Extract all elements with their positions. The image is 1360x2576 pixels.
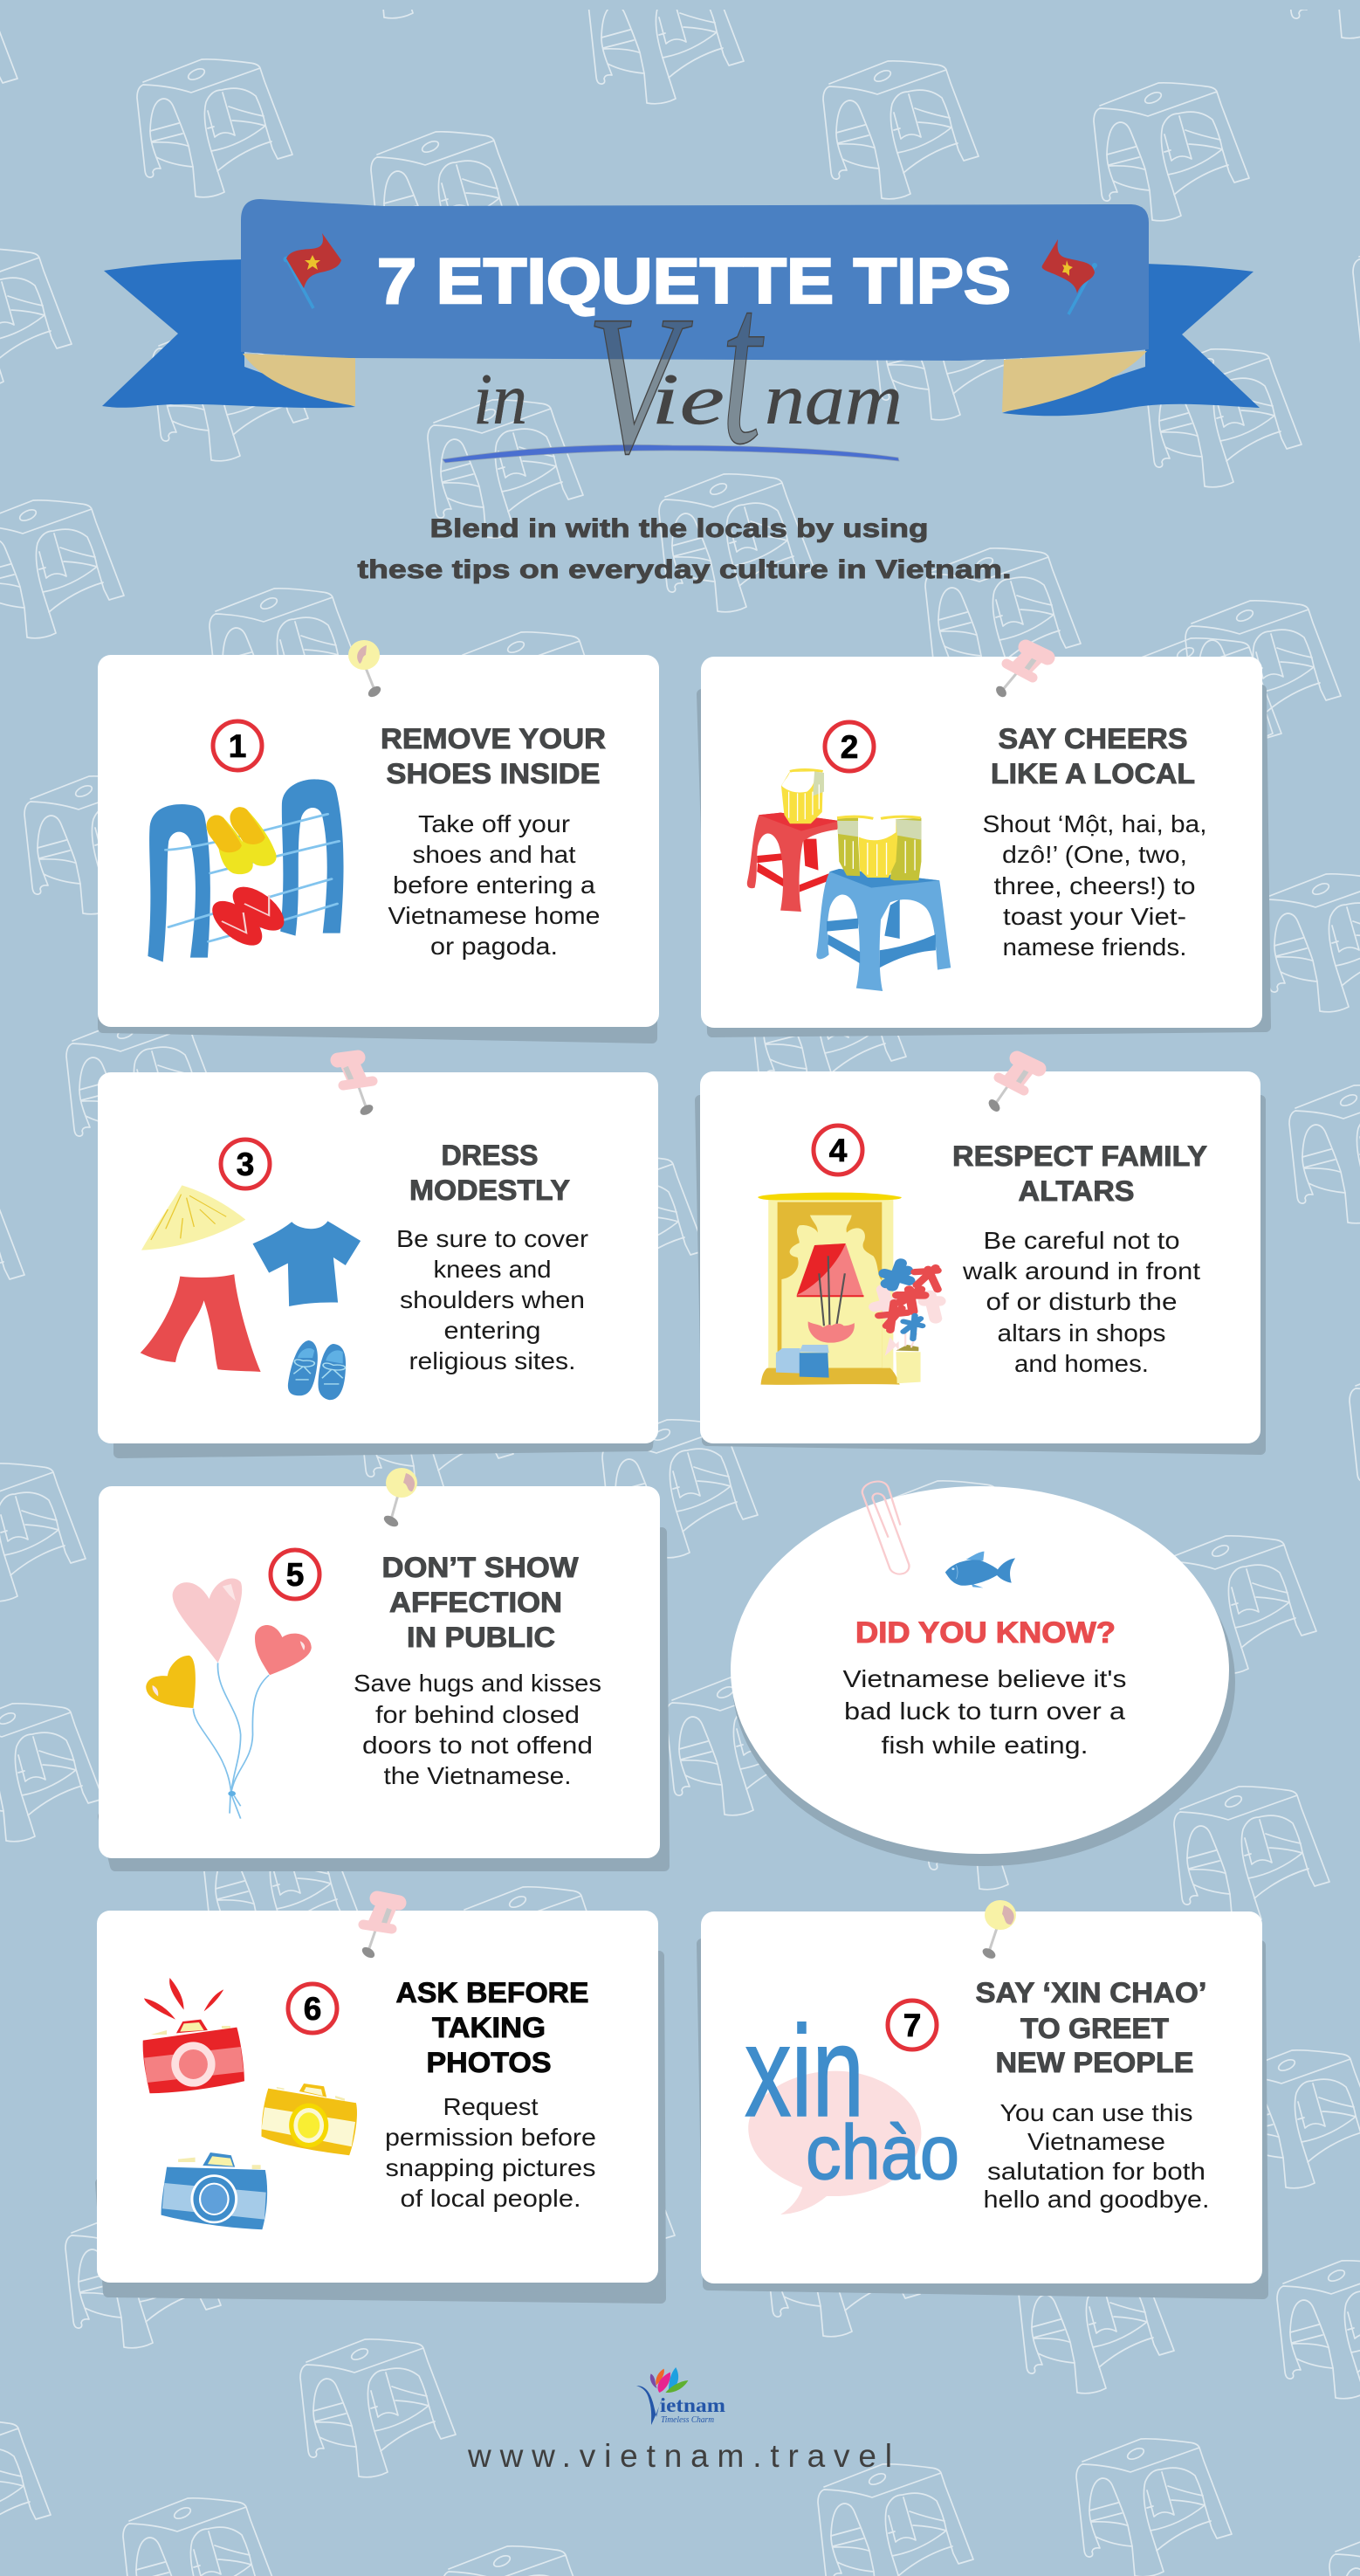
number badge 7	[888, 2001, 937, 2049]
heading	[396, 1977, 588, 2078]
title banner	[102, 199, 1260, 416]
script subtitle: in Vietnam: t	[721, 238, 766, 492]
body text: Take off your	[418, 810, 570, 837]
panel: tip 6 ask before taking photos	[97, 1898, 661, 2298]
body text: bad luck to turn over a	[844, 1698, 1125, 1725]
body text: snapping pictures	[386, 2154, 595, 2181]
body text: shoes and hat	[412, 841, 576, 868]
ellipse shadow	[732, 1498, 1235, 1866]
heading: AFFECTION	[389, 1587, 562, 1618]
number badge 1: 1	[229, 728, 246, 764]
heading	[381, 723, 606, 789]
number badge 5: 5	[286, 1557, 304, 1593]
heading: DRESS	[442, 1140, 538, 1171]
speech bubble	[748, 2071, 921, 2214]
number badge 1	[213, 721, 262, 770]
body text: Request	[443, 2093, 539, 2120]
body text	[983, 810, 1206, 961]
card shadow	[100, 1956, 661, 2298]
number badge 7: 7	[903, 2008, 921, 2043]
number badge 6: 6	[304, 1991, 321, 2027]
body text: religious sites.	[409, 1347, 576, 1374]
body text	[962, 1227, 1200, 1377]
push pin	[994, 647, 1047, 699]
logo tagline: Timeless Charm	[661, 2415, 714, 2425]
body text: before entering a	[393, 871, 595, 899]
heading: TO GREET	[1020, 2013, 1169, 2044]
number badge 3	[221, 1140, 270, 1188]
panel: tip 7 say xin chao	[701, 1900, 1263, 2294]
left flag	[283, 233, 341, 308]
number badge 5	[271, 1550, 319, 1599]
body text	[354, 1670, 601, 1789]
script subtitle: in Vietnam: ie	[651, 359, 725, 440]
heading: ASK BEFORE	[396, 1977, 588, 2008]
body text: the Vietnamese.	[384, 1762, 571, 1789]
yellow camera	[262, 2084, 357, 2155]
panel: tip 5 no affection in public	[99, 1468, 664, 1866]
heading: REMOVE YOUR	[381, 723, 606, 754]
script subtitle: in Vietnam: in	[473, 359, 545, 440]
icon: shoe rack	[148, 779, 344, 962]
icon: fish	[945, 1552, 1015, 1588]
body text: fish while eating.	[882, 1732, 1088, 1759]
body text: three, cheers!) to	[993, 872, 1196, 899]
card surface	[98, 1072, 658, 1443]
logo: Vietnam Timeless Charm	[636, 2367, 725, 2425]
panel: tip 2 say cheers	[701, 647, 1266, 1032]
body text: of or disturb the	[986, 1288, 1177, 1315]
heading: ALTARS	[1018, 1175, 1135, 1207]
heading: SHOES INSIDE	[386, 758, 601, 789]
body text: shoulders when	[400, 1286, 585, 1313]
icon: three cameras	[143, 1978, 357, 2229]
push pin	[338, 1057, 374, 1117]
heading	[991, 723, 1195, 789]
body text: Shout ‘Một, hai, ba,	[983, 810, 1206, 837]
heading: RESPECT FAMILY	[952, 1140, 1207, 1172]
script subtitle: in Vietnam: nam	[765, 359, 903, 440]
V swoosh	[636, 2386, 663, 2425]
body text: toast your Viet-	[1003, 903, 1186, 930]
body text: Vietnamese	[1027, 2128, 1165, 2155]
push pin	[382, 1468, 417, 1529]
heading: IN PUBLIC	[407, 1622, 555, 1653]
card shadow	[700, 1100, 1260, 1450]
ellipse surface	[731, 1486, 1229, 1854]
heading: DID YOU KNOW?	[855, 1616, 1116, 1650]
heading: LIKE A LOCAL	[991, 758, 1195, 789]
heading	[409, 1140, 570, 1206]
logo wordmark: ietnam	[660, 2394, 725, 2416]
body text	[396, 1225, 588, 1374]
body text: hello and goodbye.	[983, 2186, 1210, 2213]
banner body	[241, 199, 1149, 361]
body text: of local people.	[400, 2185, 581, 2212]
number badge 3: 3	[237, 1147, 254, 1182]
xin chao lettering: chào	[806, 2109, 959, 2195]
body text: Be careful not to	[983, 1227, 1180, 1254]
body text: doors to not offend	[362, 1732, 593, 1759]
panel: tip 3 dress modestly	[98, 1057, 658, 1453]
heading: MODESTLY	[409, 1174, 570, 1206]
intro text: Blend in with the locals by using	[429, 514, 929, 543]
panel: tip 1 remove your shoes	[98, 640, 659, 1038]
card surface	[701, 1911, 1262, 2283]
icon: family altar	[758, 1193, 939, 1385]
body text: knees and	[433, 1256, 552, 1283]
panel: tip 4 respect family altars	[700, 1058, 1260, 1450]
red camera with flash	[143, 1978, 244, 2093]
script subtitle: in Vietnam: V	[587, 275, 693, 495]
heading	[952, 1140, 1207, 1207]
body text: or pagoda.	[430, 933, 558, 960]
card surface	[700, 1071, 1260, 1443]
heading: TAKING	[432, 2012, 546, 2043]
card shadow	[103, 1533, 664, 1866]
body text: Vietnamese home	[388, 902, 601, 929]
icon: heart balloons	[146, 1578, 312, 1819]
heading: SAY ‘XIN CHAO’	[976, 1977, 1206, 2008]
body text: You can use this	[1000, 2099, 1192, 2126]
card shadow	[119, 1397, 653, 1453]
paper clip	[862, 1481, 909, 1574]
heading	[382, 1552, 579, 1653]
blue camera	[161, 2152, 267, 2229]
card shadow	[702, 690, 1266, 1032]
xin chao lettering: xin	[745, 2000, 864, 2144]
body text	[983, 2099, 1210, 2213]
body text	[388, 810, 601, 960]
card surface	[99, 1486, 660, 1858]
heading: DON’T SHOW	[382, 1552, 579, 1583]
heading: SAY CHEERS	[999, 723, 1187, 754]
push pin	[361, 1898, 399, 1960]
card surface	[97, 1911, 658, 2283]
left ribbon tail	[102, 259, 355, 408]
number badge 6	[288, 1984, 337, 2033]
heading	[976, 1977, 1206, 2078]
left ribbon fold	[243, 354, 355, 406]
intro text: these tips on everyday culture in Vietnam.	[358, 555, 1011, 584]
body text: Be sure to cover	[396, 1225, 588, 1252]
right ribbon tail	[1002, 264, 1260, 416]
body text: and homes.	[1014, 1350, 1149, 1377]
intro text	[358, 514, 1011, 584]
body text: for behind closed	[375, 1701, 580, 1728]
heading: NEW PEOPLE	[995, 2047, 1194, 2078]
xin chao lettering	[745, 2000, 959, 2195]
underline brush stroke	[443, 444, 899, 463]
right ribbon fold	[1002, 351, 1147, 412]
number badge 2: 2	[841, 729, 858, 765]
body text	[385, 2093, 596, 2212]
body text: Save hugs and kisses	[354, 1670, 601, 1697]
icon: stools with beers	[747, 769, 951, 991]
right flag	[1042, 239, 1097, 314]
number badge 4	[814, 1126, 862, 1174]
card shadow	[103, 699, 652, 1038]
body text	[843, 1665, 1126, 1759]
body text: permission before	[385, 2124, 596, 2151]
lotus flower	[650, 2367, 688, 2393]
icon: clothes and hat	[141, 1185, 361, 1400]
website url: www.vietnam.travel	[467, 2438, 892, 2474]
body text: namese friends.	[1002, 933, 1187, 961]
card surface	[701, 657, 1262, 1028]
body text: dzô!’ (One, two,	[1002, 841, 1187, 868]
body text: salutation for both	[987, 2158, 1205, 2185]
body text: walk around in front	[962, 1257, 1200, 1285]
number badge 4: 4	[829, 1133, 848, 1168]
title text: 7 ETIQUETTE TIPS	[377, 246, 1011, 317]
body text: altars in shops	[997, 1319, 1166, 1347]
push pin	[348, 640, 382, 699]
body text: entering	[443, 1317, 541, 1344]
number badge 2	[825, 722, 874, 771]
panel: did you know	[731, 1481, 1235, 1866]
card surface	[98, 655, 659, 1027]
push pin	[981, 1900, 1016, 1960]
heading: PHOTOS	[426, 2047, 552, 2078]
body text: Vietnamese believe it's	[843, 1665, 1126, 1692]
card shadow	[702, 1944, 1263, 2294]
push pin	[986, 1058, 1039, 1113]
